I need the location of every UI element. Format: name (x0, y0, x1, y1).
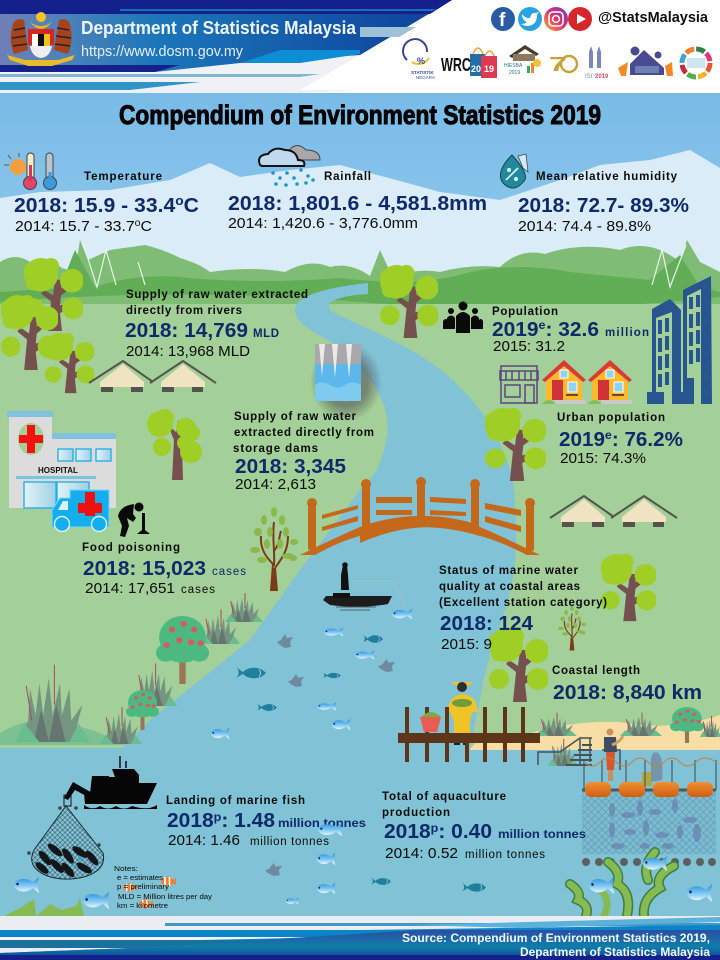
bottom water (0, 748, 720, 916)
icon: people (443, 302, 483, 333)
panel: temperature (4, 153, 199, 235)
pale distant mountains (0, 150, 720, 300)
fisherman boat (323, 562, 406, 610)
label: Rainfall (324, 171, 371, 183)
tree near coastal length (489, 628, 549, 702)
value 2014: 2014: 1.46 (168, 832, 240, 849)
value 2019: : 76.2% (612, 429, 683, 451)
partner logos: 2019 (595, 74, 609, 80)
value 2018: C (184, 195, 199, 217)
panel: raw water from rivers (125, 289, 308, 360)
small leaf tree (250, 507, 298, 591)
label: Supply of raw water extracted (126, 289, 308, 301)
icon: sun and thermometers (4, 153, 56, 190)
notes: p = preliminary (117, 882, 169, 891)
value 2018: 2018: 15.9 - 33.4 (14, 195, 166, 217)
icon: rain cloud (259, 145, 320, 187)
value 2018: 2018: 3,345 (235, 456, 346, 478)
huts lower (550, 496, 677, 527)
icon: shop (500, 366, 538, 403)
partner logos: STATISTIK (411, 70, 434, 75)
label: Temperature (84, 171, 162, 183)
icon: houses (542, 360, 632, 404)
value 2018: 2018: 14,769 (125, 320, 248, 342)
sky background (0, 93, 720, 293)
right beach (470, 715, 720, 750)
worker on fish cage (604, 728, 662, 786)
unit: million tonnes (278, 818, 366, 830)
value 2015: 2015: 74.3% (560, 450, 646, 467)
panel: rainfall (228, 145, 487, 232)
label: Population (492, 306, 558, 318)
partner logos: WRC (441, 55, 471, 75)
label: Food poisoning (82, 542, 180, 554)
value 2018: 2018: 8,840 km (553, 682, 702, 704)
value 2018: 2018: 15,023 (83, 558, 206, 580)
label: Total of aquaculture (382, 791, 506, 803)
partner logos: % (417, 56, 425, 66)
label line 2: directly from rivers (126, 305, 242, 317)
value 2019: 2019 (492, 319, 536, 341)
partner logos: 20 (471, 64, 481, 74)
social icons: f (499, 10, 506, 31)
panel: marine fish landing (166, 795, 366, 849)
value 2018: : 0.40 (438, 821, 492, 843)
huts upper (89, 361, 216, 392)
label: Urban population (557, 412, 665, 424)
value 2014: o (135, 218, 141, 229)
fish cage (582, 758, 716, 866)
title: Compendium of Environment Statistics 2019 (119, 100, 601, 130)
value 2018: 2018 (384, 821, 428, 843)
label: Status of marine water (439, 565, 579, 577)
ground (0, 304, 720, 749)
seaweed left (4, 898, 100, 916)
far green hills (0, 240, 720, 310)
website: https://www.dosm.gov.my (81, 43, 243, 60)
dock (398, 707, 540, 762)
icon: ambulance (52, 490, 109, 532)
panel: urban population (557, 412, 683, 467)
panel: mean relative humidity (500, 154, 689, 235)
footer band (0, 916, 720, 960)
hospital (7, 411, 116, 508)
icon: fishing net (27, 795, 104, 879)
value 2019: e (605, 428, 612, 442)
value 2014: 2014: 0.52 (385, 845, 458, 862)
partner logos: 19 (484, 64, 494, 74)
partner logos: ISI (585, 74, 593, 80)
unit 2014: million tonnes (465, 849, 545, 861)
value 2014: C (141, 218, 152, 235)
partner logos: 7 (549, 54, 567, 76)
small leaf tree near marine status (558, 606, 586, 650)
source text (402, 931, 710, 959)
value 2015: 2015: 31.2 (493, 338, 565, 355)
clownfish (123, 876, 176, 909)
social handle: @StatsMalaysia (598, 10, 709, 26)
label line 2: production (382, 807, 450, 819)
unit 2014: million tonnes (250, 836, 329, 848)
value 2014: 2014: 2,613 (235, 476, 316, 493)
value 2018: 2018: 1,801.6 - 4,581.8mm (228, 193, 487, 215)
notes: e = estimates (117, 873, 163, 882)
value 2014: 2014: 74.4 - 89.8% (518, 218, 651, 235)
tree near marine status (601, 554, 657, 621)
fisher on dock (446, 682, 478, 745)
unit: MLD (253, 328, 279, 340)
tree upper centre (380, 265, 439, 338)
stairs (538, 738, 620, 770)
label line 3: storage dams (233, 443, 318, 455)
label: Landing of marine fish (166, 795, 305, 807)
fish in sea (13, 823, 712, 909)
tree by dam panel (147, 409, 202, 480)
value 2018: p (431, 821, 438, 835)
icon: fishing boat (64, 756, 157, 809)
dam (310, 342, 382, 422)
label: Supply of raw water (234, 411, 357, 423)
value 2018: : 1.48 (221, 810, 275, 832)
bridge (300, 477, 540, 555)
icon: tower buildings (647, 276, 712, 404)
shore shrubs (535, 707, 720, 766)
social icons (491, 7, 592, 31)
hospital: HOSPITAL (38, 466, 78, 475)
value 2019: : 32.6 (546, 319, 599, 341)
panel: marine water quality (439, 565, 607, 653)
label: Coastal length (552, 665, 640, 677)
unit: cases (212, 566, 246, 578)
panel: population (443, 302, 649, 355)
panel: raw water from dams (233, 411, 374, 493)
notes: Notes: (114, 864, 138, 873)
label: Mean relative humidity (536, 171, 678, 183)
unit: million tonnes (498, 829, 586, 841)
icon: humidity drop (500, 154, 528, 188)
value 2018: p (214, 810, 221, 824)
partner logos (403, 39, 710, 80)
trees upper left (1, 258, 95, 393)
value 2014: 2014: 1,420.6 - 3,776.0mm (228, 215, 418, 232)
label line 2: extracted directly from (234, 427, 374, 439)
label line 2: quality at coastal areas (439, 581, 580, 593)
source text: Department of Statistics Malaysia (520, 945, 710, 959)
organisation name: Department of Statistics Malaysia (81, 18, 357, 38)
tree near urban population (485, 408, 547, 481)
river (122, 283, 516, 748)
value 2015: 2015: 9 (441, 636, 492, 653)
partner logos: 2019 (509, 70, 520, 76)
value 2018: 2018: 124 (440, 613, 534, 635)
notes: km = kilometre (117, 901, 168, 910)
value 2014: 2014: 17,651 (85, 580, 175, 597)
unit: million (605, 327, 649, 339)
value 2019: e (539, 318, 546, 332)
notes (114, 864, 212, 910)
value 2014: 2014: 15.7 - 33.7 (15, 218, 128, 235)
panel: aquaculture production (382, 791, 586, 862)
unit 2014: cases (181, 584, 215, 596)
value 2014: 2014: 13,968 MLD (126, 343, 250, 360)
value 2018: 2018: 72.7- 89.3% (518, 195, 689, 217)
source text: Source: Compendium of Environment Statistics 2019, (402, 931, 710, 945)
partner logos: HIESBA (504, 63, 523, 69)
panel: food poisoning (82, 542, 246, 597)
seaweed right (570, 852, 674, 916)
value 2018: o (175, 193, 184, 208)
grass and fruit shrubs (15, 593, 263, 744)
label line 3: (Excellent station category) (439, 597, 607, 609)
value 2019: 2019 (559, 429, 604, 451)
crest (7, 12, 75, 66)
panel: coastal length (552, 665, 702, 704)
icon: sick person (118, 502, 150, 537)
value 2018: 2018 (167, 810, 212, 832)
partner logos: NEGARA (416, 75, 435, 80)
notes: MLD = Million litres per day (118, 892, 212, 901)
left shore mound (0, 720, 125, 745)
fish in river (210, 609, 412, 739)
header (0, 0, 720, 93)
